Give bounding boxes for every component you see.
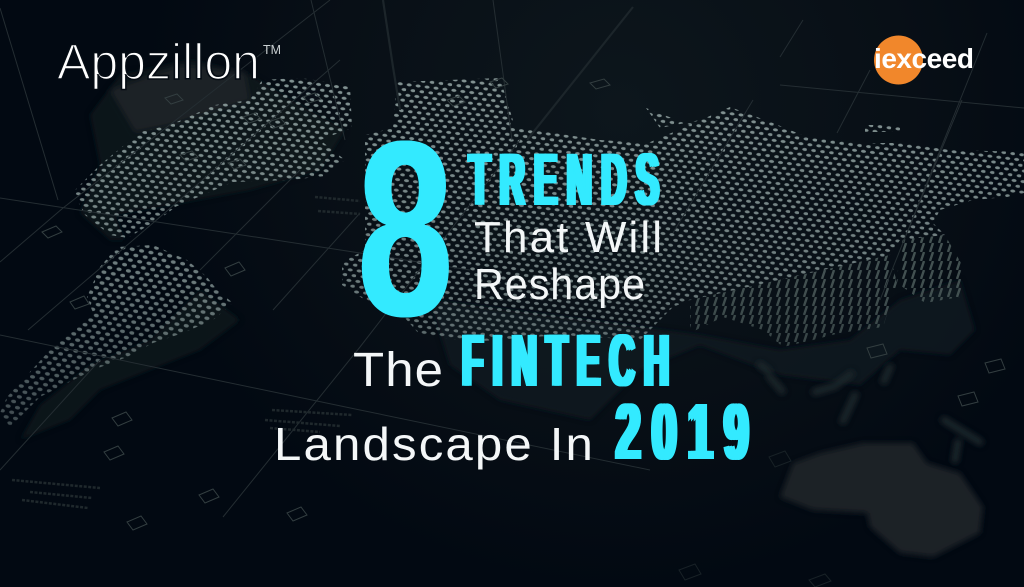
map: North America xyxy=(73,78,352,238)
map: Eurasia xyxy=(342,78,1024,342)
logo orange circle xyxy=(874,36,923,84)
title: The: The xyxy=(353,344,444,397)
map: dotted landmasses xyxy=(0,78,1024,427)
logo wordmark: iexceed xyxy=(874,43,974,74)
title: Landscape In: Landscape In xyxy=(274,418,595,470)
title: FINTECH: FINTECH xyxy=(462,321,678,403)
map: South America xyxy=(0,245,233,427)
map shadow landmasses xyxy=(20,60,975,440)
map: lower Asia streaks xyxy=(690,235,965,347)
title: That Will: That Will xyxy=(474,213,662,262)
faint micro text xyxy=(12,197,360,508)
logo: Appzillon: Appzillon xyxy=(57,34,260,90)
title xyxy=(274,89,760,476)
logo: iexceed xyxy=(874,36,974,84)
logo trademark: TM xyxy=(263,43,281,57)
title: Reshape: Reshape xyxy=(474,260,646,309)
coordinate markers xyxy=(42,78,1005,530)
title: 2019: 2019 xyxy=(616,387,760,476)
map: northern islands xyxy=(646,108,900,132)
title numeral 8: 8 xyxy=(358,89,453,369)
map: Australia xyxy=(780,443,983,557)
title: TRENDS: TRENDS xyxy=(469,140,668,222)
map: Southeast Asia islands xyxy=(760,365,980,460)
